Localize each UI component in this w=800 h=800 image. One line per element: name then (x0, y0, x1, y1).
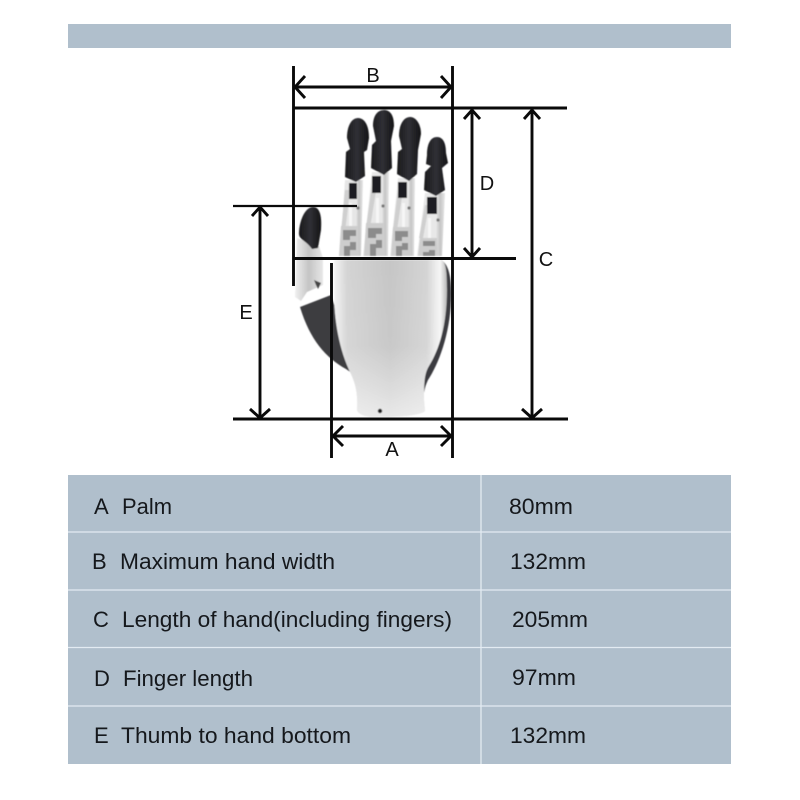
row A name: Palm (122, 494, 172, 519)
icon: thumb tip (299, 207, 321, 249)
icon: middle finger metal (363, 172, 389, 256)
row B value: 132mm (510, 549, 586, 574)
row B key: B (92, 549, 107, 574)
icon: index finger metal (339, 180, 363, 256)
icon: little finger tip (424, 137, 448, 196)
dimension A and B extension right (451, 66, 454, 458)
hand illustration (295, 110, 451, 417)
icon: thumb hinge (314, 280, 321, 289)
icon: little finger metal (417, 193, 445, 256)
label D: D (480, 173, 494, 195)
thumb top line (233, 205, 357, 207)
hand bottom line (233, 418, 568, 420)
icon: right side shell of palm (420, 260, 451, 398)
row C name: Length of hand(including fingers) (122, 607, 452, 632)
row A value: 80mm (509, 494, 573, 519)
icon: palm shell (334, 260, 447, 417)
row E value: 132mm (510, 723, 586, 748)
dimension B extension left (292, 66, 295, 286)
dimension lines (233, 66, 568, 458)
label B: B (366, 65, 380, 87)
icon: ring finger tip (397, 117, 421, 181)
row B name: Maximum hand width (120, 549, 335, 574)
icon: thumb base (300, 295, 359, 378)
arrow B (294, 76, 452, 98)
row E key: E (94, 723, 109, 748)
icon: middle finger tip (371, 110, 394, 175)
label E: E (239, 302, 253, 324)
row C value: 205mm (512, 607, 588, 632)
row D key: D (94, 666, 110, 691)
icon: ring finger metal (390, 178, 415, 256)
row D name: Finger length (123, 666, 253, 691)
table background (68, 475, 731, 764)
arrow D (464, 109, 480, 258)
row E name: Thumb to hand bottom (121, 723, 351, 748)
icon: index finger tip (345, 118, 369, 182)
arrow C (522, 109, 542, 418)
table dividers (68, 475, 731, 764)
icon: palm highlight (334, 260, 447, 417)
label A: A (385, 439, 399, 461)
finger base line (293, 257, 516, 260)
arrow E (250, 207, 270, 418)
label C: C (539, 249, 553, 271)
hand top line (293, 107, 567, 109)
icon: thumb metal (295, 238, 323, 301)
top banner (68, 24, 731, 48)
row D value: 97mm (512, 665, 576, 690)
row A key: A (94, 494, 109, 519)
dimension A extension left (330, 263, 333, 458)
icon: palm screw hole (378, 409, 382, 413)
row C key: C (93, 607, 109, 632)
arrow A (332, 426, 452, 446)
